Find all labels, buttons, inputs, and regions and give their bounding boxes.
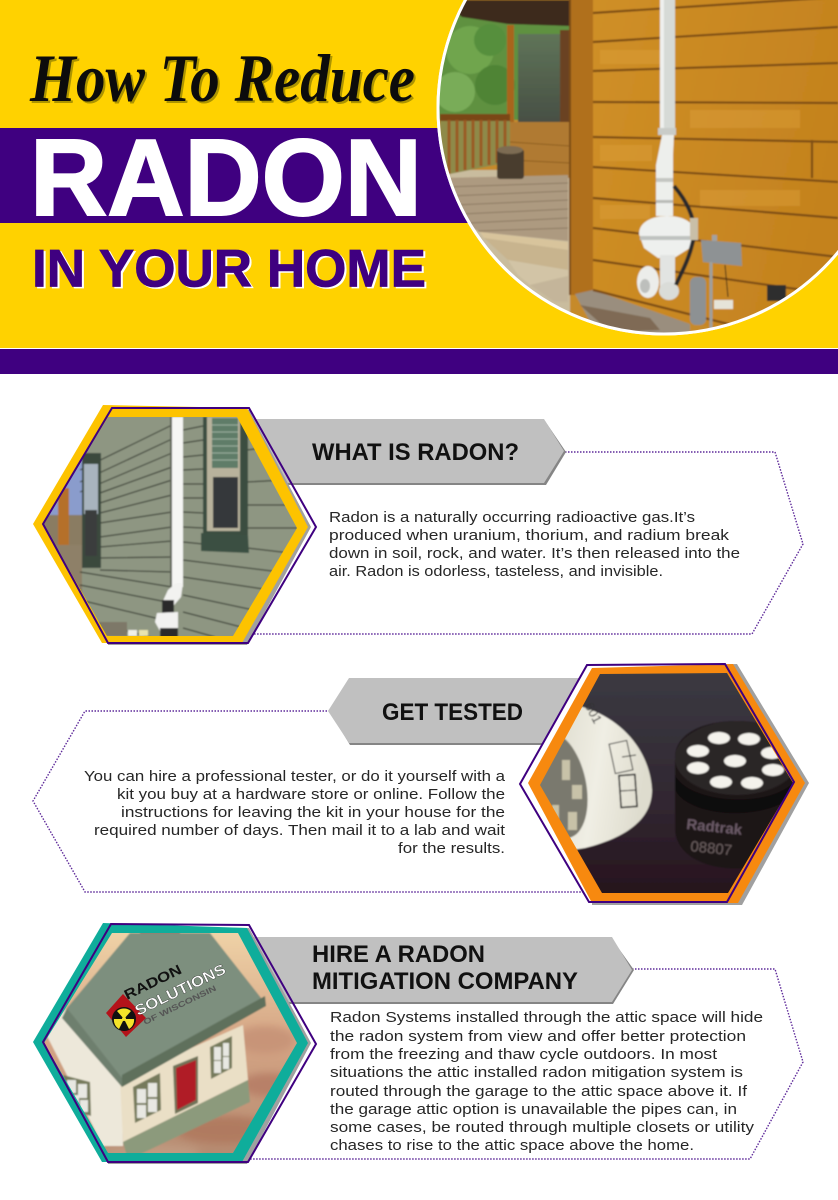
title: How To Reduce: How To Reduce [29,40,415,116]
body text: the radon system from view and offer better protection [330,1028,746,1045]
body text: kit you buy at a hardware store or online. Follow the [117,786,505,803]
body text: the garage attic option is unavailable the pipes can, in [330,1101,737,1118]
body text: produced when uranium, thorium, and radium break [329,527,730,544]
body text: situations the attic installed radon mitigation system is [330,1064,743,1081]
body text: Radon is a naturally occurring radioactive gas.It’s [329,509,695,526]
body text: routed through the garage to the attic space above it. If [330,1083,748,1100]
logo: Radon Solutions of Wisconsin: RADON [121,961,184,1003]
dotted outline [250,452,803,634]
heading arrow: HIRE A RADON [312,941,485,968]
hexagon photo: downspout on siding [33,405,316,645]
logo: Radon Solutions of Wisconsin: OF WISCONSIN [142,984,218,1027]
body text [329,509,740,580]
hexagon photo: radon test kits: Radtrak [686,816,744,839]
bottom header band [0,349,838,374]
header background [0,0,838,348]
body text [330,1009,763,1154]
body text: some cases, be routed through multiple closets or utility [330,1119,755,1136]
body text: Radon Systems installed through the attic space will hide [330,1009,763,1026]
header photo: radon fan on a wooden house [430,0,838,340]
dotted outline [248,969,803,1159]
body text [84,768,506,857]
body text: required number of days. Then mail it to a lab and wait [94,822,506,839]
hexagon photo: radon test kits: 08807 [690,838,733,859]
panel: hire a radon mitigation company [33,923,803,1164]
body text: from the freezing and thaw cycle outdoors. In most [330,1046,718,1063]
body text: instructions for leaving the kit in your house for the [121,804,505,821]
logo: Radon Solutions of Wisconsin: SOLUTIONS [132,961,229,1020]
heading arrow: GET TESTED [382,699,523,726]
title: How To Reduce: How To Reduce [31,42,417,118]
heading arrow [250,419,566,485]
title: RADON: RADON [30,117,422,239]
dotted outline [33,711,592,892]
heading arrow: MITIGATION COMPANY [312,968,578,995]
panel: what is radon [33,405,803,645]
body text: air. Radon is odorless, tasteless, and invisible. [329,563,663,580]
title: IN YOUR HOME: IN YOUR HOME [32,240,426,298]
body text: chases to rise to the attic space above the home. [330,1137,694,1154]
hexagon photo: radon test kits [519,664,809,905]
hexagon photo: radon test kits: 601 [582,700,605,726]
hexagon photo: toy house in hands [33,923,316,1164]
body text: down in soil, rock, and water. It’s then released into the [329,545,740,562]
title: IN YOUR HOME: IN YOUR HOME [34,241,428,300]
header purple ribbon [0,128,480,223]
panel: get tested [33,664,809,905]
body text: You can hire a professional tester, or do it yourself with a [84,768,506,785]
heading arrow: WHAT IS RADON? [312,439,519,466]
heading arrow [328,678,598,745]
heading arrow [250,937,634,1004]
logo: Radon Solutions of Wisconsin [106,961,229,1037]
body text: for the results. [398,840,505,857]
